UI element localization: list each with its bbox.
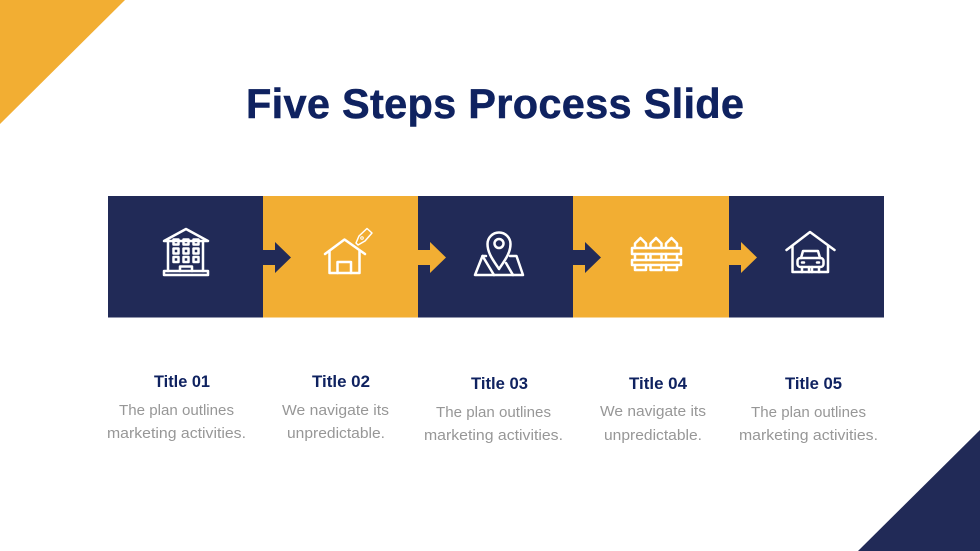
description: step 4: We navigate its [600, 403, 706, 420]
description: step 1: marketing activities. [107, 425, 246, 442]
heading: title 04: Title 04 [629, 375, 688, 393]
panel: step 2 [263, 196, 418, 318]
panel: step 3 [418, 196, 573, 318]
description: step 5: The plan outlines [751, 404, 866, 421]
heading: title 05: Title 05 [785, 375, 842, 393]
arrow: step 4 to 5 [729, 242, 757, 273]
arrow: step 2 to 3 [418, 242, 446, 273]
process band [108, 196, 884, 318]
text block: step 1 [107, 373, 246, 442]
heading: title 01: Title 01 [154, 373, 210, 391]
text block: step 4 [600, 375, 706, 444]
icon: apartment building [164, 229, 208, 275]
text block: step 3 [424, 375, 563, 444]
icon: map with location pin [475, 232, 523, 275]
text block: step 2 [282, 373, 389, 442]
description: step 2: unpredictable. [287, 425, 385, 442]
description: step 3: marketing activities. [424, 427, 563, 444]
description: step 4: unpredictable. [604, 427, 702, 444]
panel: step 4 [573, 196, 729, 318]
arrow: step 3 to 4 [573, 242, 601, 273]
panel: step 1 [108, 196, 263, 318]
description: step 3: The plan outlines [436, 404, 551, 421]
description: step 5: marketing activities. [739, 427, 878, 444]
icon: house with price tag [325, 228, 372, 273]
heading: title 02: Title 02 [312, 373, 370, 391]
icon: picket fence [632, 238, 681, 270]
description: step 2: We navigate its [282, 402, 389, 419]
panel: step 5 [729, 196, 884, 318]
title: Five Steps Process Slide [246, 80, 744, 127]
arrow: step 1 to 2 [263, 242, 291, 273]
description: step 1: The plan outlines [119, 402, 234, 419]
corner triangle: bottom right [858, 430, 980, 551]
corner triangle: top left [0, 0, 125, 124]
icon: garage with car [786, 232, 834, 272]
text block: step 5 [739, 375, 878, 444]
heading: title 03: Title 03 [471, 375, 528, 393]
